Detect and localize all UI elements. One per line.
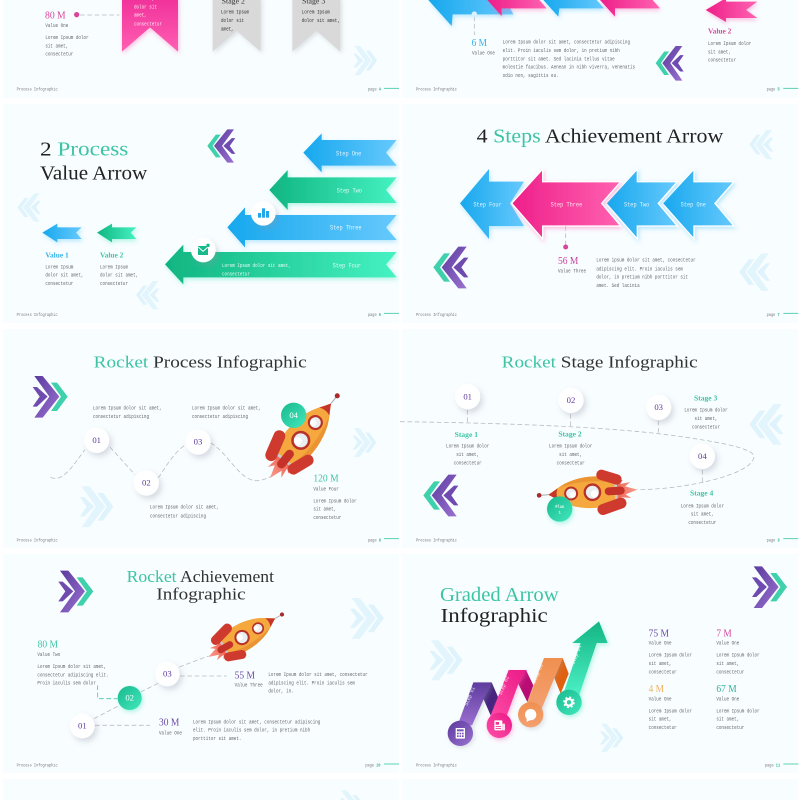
value 4 M: sit amet,: [649, 716, 672, 723]
footer: Process Infographic: [17, 313, 58, 318]
node 04: 04: [289, 410, 299, 420]
title: Rocket Process Infographic: [94, 352, 307, 371]
rocket: [249, 377, 358, 494]
value 75 M: 75 M: [649, 628, 669, 639]
value 4 M: Lorem Ipsum dolor: [649, 708, 692, 715]
node 01: 01: [463, 391, 472, 401]
stage 3: Lorem Ipsum dolor: [684, 407, 728, 414]
value 80 M: Lorem Ipsum dolor: [45, 35, 89, 41]
value 120 M: consectetur: [313, 515, 342, 521]
arrow: step four: [460, 169, 524, 239]
plan badge: Plan: [555, 505, 565, 510]
footer: Process Infographic: [17, 763, 58, 769]
ribbon: step 02: Step 02: [497, 675, 511, 696]
rocket: [198, 595, 294, 675]
icon: chevrons: [33, 376, 68, 418]
arrow: step three: Step Three: [551, 201, 583, 209]
value 67 M: [716, 684, 760, 731]
node 04: 04: [698, 451, 707, 461]
title: Infographic: [156, 585, 246, 604]
node 01: 01: [92, 435, 101, 445]
icon: chevrons: [423, 475, 458, 516]
panel: page 7 4 steps achievement arrow: [416, 126, 798, 318]
title: Graded Arrow: [440, 584, 559, 606]
node 03: 03: [194, 437, 202, 447]
stage 4: sit amet,: [691, 511, 714, 518]
body text: [596, 257, 696, 289]
stage 4: [681, 490, 724, 526]
value 30 M: Value One: [159, 730, 182, 737]
pink banner: consectetur: [134, 21, 162, 28]
value 75 M: Value One: [649, 640, 672, 647]
body text 30 M: elit. Proin iaculis sem dolor, in pretium nibh: [193, 727, 310, 734]
icon: chevrons: [433, 247, 468, 288]
pale chevrons: [17, 193, 159, 309]
text blocks: Lorem Ipsum dolor sit amet,: [93, 405, 162, 412]
body text: adipiscing elit. Proin iaculis sem: [596, 266, 683, 273]
footer: page 8: [368, 539, 382, 544]
title: 4 Steps Achievement Arrow: [477, 126, 724, 148]
text blocks: consectetur adipiscing: [150, 513, 206, 520]
value 67 M: 67 M: [716, 684, 737, 695]
icon: bar chart badge: [251, 201, 276, 226]
value 6 M: [472, 38, 495, 57]
grey banner stage 2: amet,: [221, 26, 234, 33]
node 03: [155, 662, 180, 686]
pale chevrons: [739, 130, 773, 291]
footer: Process Infographic: [416, 313, 458, 318]
icon: chat badge: [518, 702, 543, 727]
connector dot and line: [472, 11, 477, 35]
value 2: Lorem Ipsum: [100, 264, 128, 271]
title: Infographic: [441, 605, 548, 627]
node 03: [185, 429, 211, 455]
arrow: step one: [303, 133, 397, 172]
body text 30 M: [193, 719, 321, 742]
stage 4: Stage 4: [690, 490, 714, 498]
value 4 M: [649, 684, 692, 731]
pale chevrons: [429, 640, 623, 752]
value 7 M: [716, 628, 760, 676]
value 2: consectetur: [708, 57, 736, 64]
connector dot and line: [563, 226, 568, 249]
node 03: [646, 395, 671, 420]
value 75 M: consectetur: [649, 669, 677, 676]
value 30 M: [159, 718, 182, 737]
arrow: step four: Step Four: [473, 201, 502, 209]
node 01: [84, 428, 109, 453]
value 120 M: sit amet,: [313, 506, 336, 513]
value 6 M: 6 M: [472, 38, 487, 49]
body text 30 M: porttitor sit amet.: [193, 736, 241, 742]
ribbon: step 01: Step 01: [463, 686, 477, 707]
stage 1: Lorem Ipsum dolor: [446, 443, 489, 450]
connector dot and dashed line: [74, 12, 119, 17]
value 120 M: 120 M: [313, 474, 339, 485]
panel: page 4 stage banners: [17, 0, 399, 93]
grey banner stage 2: dolor sit: [221, 18, 244, 24]
footer: Process Infographic: [17, 87, 58, 93]
stage 4: Lorem Ipsum dolor: [681, 503, 724, 510]
node 02: [118, 686, 142, 710]
value 55 M: [235, 670, 263, 689]
stage 3: consectetur: [692, 424, 720, 431]
panel: page 5 arrows and text: [416, 0, 798, 93]
footer: [17, 538, 399, 544]
panel: page 11 graded arrow: [416, 566, 798, 769]
value 2: sit amet,: [708, 49, 731, 56]
body text 55 M: dolor, in.: [268, 688, 294, 695]
title: Rocket Achievement: [127, 567, 274, 586]
pale chevron: [749, 404, 783, 445]
stage 2: Stage 2: [558, 431, 582, 439]
arrow: step one: Step One: [336, 150, 362, 158]
footer: [17, 87, 399, 93]
rocket: [535, 466, 639, 520]
body text: Lorem ipsum dolor sit amet, consectetur: [596, 257, 696, 264]
node 02: 02: [567, 395, 575, 405]
value 80 M: 80 M: [45, 11, 66, 22]
footer: [416, 313, 798, 318]
value 56 M: 56 M: [558, 256, 579, 267]
value 7 M: Lorem Ipsum dolor: [716, 652, 760, 659]
footer: Process Infographic: [17, 538, 58, 544]
body text: amet. Sed lacinia: [596, 283, 640, 289]
value 67 M: Lorem Ipsum dolor: [716, 708, 760, 715]
value 30 M: 30 M: [159, 718, 180, 729]
panel: page 6 2 process value arrow: [17, 129, 399, 318]
pink banner: [122, 0, 178, 52]
body text 55 M: adipiscing elit. Proin iaculis sem: [268, 680, 355, 687]
value 80 M: consectetur adipiscing elit.: [37, 672, 109, 679]
pink banner: dolor sit: [134, 4, 157, 11]
arrow: step two: [606, 169, 677, 239]
ribbon: step 03: [525, 658, 569, 709]
title: [127, 567, 274, 604]
footer: page 10: [365, 764, 381, 769]
arrow: step two: Step Two: [337, 187, 362, 195]
title: 2 Process: [40, 139, 129, 161]
node 04: [281, 403, 306, 428]
body text: odio non, sagittis eu.: [503, 73, 559, 79]
body text 55 M: Lorem Ipsum dolor sit amet, consectetur: [268, 672, 368, 678]
value 7 M: 7 M: [716, 628, 732, 639]
node 03: 03: [163, 669, 172, 679]
arrow: step four: consectetur: [222, 271, 250, 278]
value 1: Lorem Ipsum: [45, 264, 74, 271]
footer: [17, 313, 399, 318]
clipped arrow row: [428, 0, 660, 26]
arrow: step three: Step Three: [330, 224, 362, 232]
footer: page 9: [767, 539, 780, 544]
node 01: [70, 714, 95, 738]
dashed curve: [51, 443, 272, 481]
stage 3: Stage 3: [694, 394, 718, 402]
stage 1: [446, 431, 489, 467]
title: Value Arrow: [40, 163, 148, 185]
value 67 M: Value One: [716, 696, 739, 703]
stage 3: [684, 394, 728, 431]
icon: newspaper badge: [487, 713, 512, 738]
value 80 M: Proin iaculis sem dolor: [37, 680, 96, 687]
pink value arrow: [706, 0, 757, 22]
value 80 M: 80 M: [38, 639, 58, 650]
ribbon: step 02: [489, 670, 533, 720]
green elbow connector: [98, 685, 117, 699]
text blocks: consectetur adipiscing: [192, 414, 248, 420]
node 02: 02: [125, 693, 134, 703]
plan badge: [547, 496, 572, 522]
icon: gear badge: [556, 690, 582, 715]
value 7 M: consectetur: [716, 669, 745, 676]
value 1: Value 1: [45, 251, 69, 259]
dashed diagonal and connectors: [94, 656, 227, 725]
body text: [503, 39, 635, 79]
grey banner stage 2: Lorem Ipsum: [221, 9, 249, 16]
stage 2: Lorem Ipsum dolor: [549, 443, 592, 450]
plan badge: 1: [559, 511, 561, 516]
value 80 M: Value Two: [37, 652, 60, 658]
value 80 M: Lorem Ipsum dolor sit amet,: [37, 664, 106, 670]
value 4 M: Value One: [649, 696, 672, 703]
footer: [416, 538, 798, 544]
node 03: 03: [654, 402, 663, 412]
value 120 M: [313, 474, 357, 521]
icon: chevrons: [752, 566, 787, 608]
footer: Process Infographic: [416, 538, 458, 544]
body text: elit. Proin iaculis sem dolor, in pretium nibh: [503, 48, 620, 54]
text blocks: Lorem Ipsum dolor sit amet,: [150, 504, 219, 511]
stage 1: sit amet,: [456, 452, 479, 458]
value 4 M: consectetur: [649, 725, 677, 731]
ribbon: step 04 arrow: [563, 621, 608, 695]
icon: calculator badge: [448, 721, 473, 746]
icon: mail badge: [191, 238, 216, 262]
footer: Process Infographic: [416, 87, 458, 93]
footer: [17, 763, 399, 769]
stage 3: sit amet,: [695, 416, 717, 422]
value 1: [45, 251, 84, 287]
value 1: consectetur: [45, 281, 74, 287]
value 2: Value 2: [100, 251, 124, 259]
stage 2: [549, 431, 592, 467]
body text: Lorem Ipsum dolor sit amet, consectetur adipiscing: [503, 39, 630, 46]
grey banner stage 3: dolor sit amet,: [302, 18, 340, 24]
value 75 M: sit amet,: [649, 661, 672, 667]
arrow: step three: [227, 207, 397, 247]
stage 1: consectetur: [454, 460, 482, 467]
icon: chevrons: [207, 129, 235, 163]
value 2: dolor sit amet,: [100, 272, 138, 279]
pink banner: amet,: [134, 12, 147, 19]
value 120 M: Value Four: [313, 486, 339, 493]
value 67 M: sit amet,: [716, 716, 739, 723]
value 75 M: [649, 628, 692, 676]
stage 2: sit amet,: [559, 452, 582, 458]
pale chevron: [350, 598, 384, 639]
value 80 M: sit amet,: [45, 43, 68, 50]
arrow: step two: [269, 170, 397, 210]
title: [440, 584, 559, 627]
value 1: dolor sit amet,: [45, 272, 84, 279]
grey banner stage 3: [292, 0, 340, 52]
panel: page 9 rocket stage: [400, 352, 798, 544]
ribbon: step 03: Step 03: [531, 663, 545, 684]
value 2: consectetur: [100, 281, 128, 287]
arrow: step two: Step Two: [624, 201, 650, 209]
body text 30 M: Lorem Ipsum dolor sit amet, consectetur adipiscing: [193, 719, 321, 726]
value 80 M: [37, 639, 109, 687]
small blue arrow: [42, 224, 82, 242]
grey banner stage 3: Lorem Ipsum: [302, 9, 330, 16]
footer: page 5: [767, 88, 780, 93]
node 04: [690, 444, 715, 469]
value 7 M: sit amet,: [716, 661, 739, 667]
node 02: 02: [142, 478, 151, 488]
footer: page 11: [765, 764, 781, 769]
value 6 M: Value One: [472, 50, 495, 57]
value 67 M: consectetur: [716, 725, 745, 731]
body text: molestie faucibus. Aenean in nibh viverra, venenatis: [503, 64, 635, 71]
value 2: Lorem Ipsum dolor: [708, 41, 751, 47]
arrow: step four: [165, 245, 397, 284]
text blocks: consectetur adipiscing: [93, 414, 149, 420]
text blocks: Lorem Ipsum dolor sit amet,: [192, 405, 261, 412]
title: Rocket Stage Infographic: [502, 352, 698, 371]
stage 4: consectetur: [688, 520, 717, 526]
body text 55 M: [268, 672, 368, 695]
arrow: step one: Step One: [681, 201, 706, 209]
pale chevron decoration: [353, 46, 377, 75]
footer: Process Infographic: [416, 763, 458, 769]
value 55 M: Value Three: [235, 682, 263, 689]
value 80 M: consectetur: [45, 51, 74, 58]
icon: chevrons: [656, 46, 684, 81]
value 7 M: Value One: [716, 640, 739, 647]
dashed path: [400, 410, 754, 490]
value 120 M: Lorem Ipsum dolor: [313, 498, 357, 505]
pale chevrons: [80, 428, 376, 527]
ribbon: step 01: [458, 682, 499, 725]
arrow: step one: [662, 169, 734, 239]
pale chevron next slide: [340, 790, 364, 800]
footer: page 6: [368, 314, 382, 318]
footer: page 7: [767, 314, 780, 318]
value 80 M: [45, 11, 89, 58]
footer: [416, 87, 798, 93]
node 02: [558, 388, 584, 413]
footer: page 4: [368, 88, 382, 93]
body text: porttitor sit amet. Sed lacinia tellus vitae: [503, 56, 615, 63]
value 2: [100, 251, 138, 287]
footer: [416, 763, 798, 769]
node 01: [455, 384, 480, 409]
icon: chevrons: [58, 571, 93, 612]
panel: page 10 rocket achievement: [17, 567, 399, 800]
title: [40, 139, 148, 185]
value 2: Value 2: [708, 28, 732, 36]
value 75 M: Lorem Ipsum dolor: [649, 652, 692, 659]
grey banner stage 2: [213, 0, 261, 52]
ribbon: step 04 arrow: Step 04: [570, 645, 584, 665]
small green arrow: [97, 224, 136, 242]
value 80 M: Value One: [45, 23, 68, 29]
text blocks: [93, 405, 261, 520]
node 01: 01: [78, 721, 87, 731]
arrow: step four: Step Four: [333, 262, 361, 270]
value 56 M: Value Three: [558, 268, 586, 275]
body text: dolor, in pretium nibh porttitor sit: [596, 274, 688, 281]
value 55 M: 55 M: [235, 670, 255, 681]
node 02: [134, 470, 159, 496]
arrow: step three: [512, 169, 621, 239]
arrow: step four: Lorem Ipsum dolor sit amet,: [222, 263, 291, 269]
value 4 M: 4 M: [649, 684, 664, 695]
value 56 M: [558, 256, 586, 275]
value 2: [708, 28, 751, 64]
stage 2: consectetur: [557, 460, 585, 467]
panel: page 8 rocket process: [17, 352, 399, 544]
stage 1: Stage 1: [455, 431, 479, 439]
